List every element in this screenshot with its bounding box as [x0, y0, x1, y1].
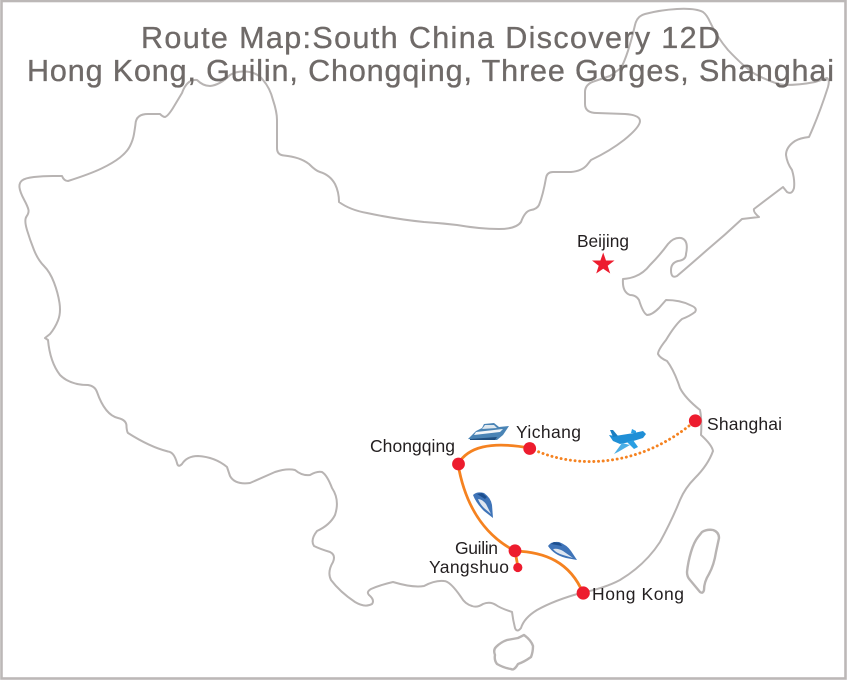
label: Chongqing: Chongqing	[370, 436, 455, 456]
label: Hong Kong: Hong Kong	[592, 584, 684, 604]
icon: train between Guilin and Hong Kong	[548, 542, 577, 560]
marker: Shanghai	[689, 414, 702, 427]
Hainan island	[494, 635, 533, 669]
route: Guilin to Hong Kong	[515, 551, 583, 593]
title line 2: Hong Kong, Guilin, Chongqing, Three Gorges, Shanghai	[27, 54, 834, 88]
title	[27, 21, 834, 88]
label: Guilin: Guilin	[455, 538, 498, 558]
city markers	[452, 252, 702, 600]
icon: train between Chongqing and Guilin	[473, 492, 493, 518]
icon: Beijing star	[592, 252, 614, 274]
marker: Chongqing	[452, 458, 465, 470]
icon: airplane	[609, 429, 646, 454]
label: Beijing: Beijing	[577, 231, 629, 251]
marker: Yangshuo	[513, 563, 522, 572]
label: Yangshuo: Yangshuo	[429, 557, 509, 577]
route: Guilin to Yangshuo	[515, 551, 518, 567]
label: Yichang: Yichang	[516, 422, 581, 442]
marker: Yichang	[523, 442, 536, 455]
marker: Hong Kong	[577, 586, 590, 600]
route: Yichang to Shanghai flight	[530, 421, 695, 462]
label: Shanghai: Shanghai	[707, 414, 782, 434]
route lines	[458, 421, 695, 593]
route: Chongqing to Guilin	[458, 464, 515, 551]
icon: boat	[468, 423, 509, 440]
title line 1: Route Map:South China Discovery 12D	[141, 21, 720, 55]
marker: Guilin	[509, 544, 521, 557]
city labels	[370, 231, 782, 604]
Taiwan island	[687, 530, 719, 593]
route: Chongqing to Yichang	[458, 445, 530, 464]
